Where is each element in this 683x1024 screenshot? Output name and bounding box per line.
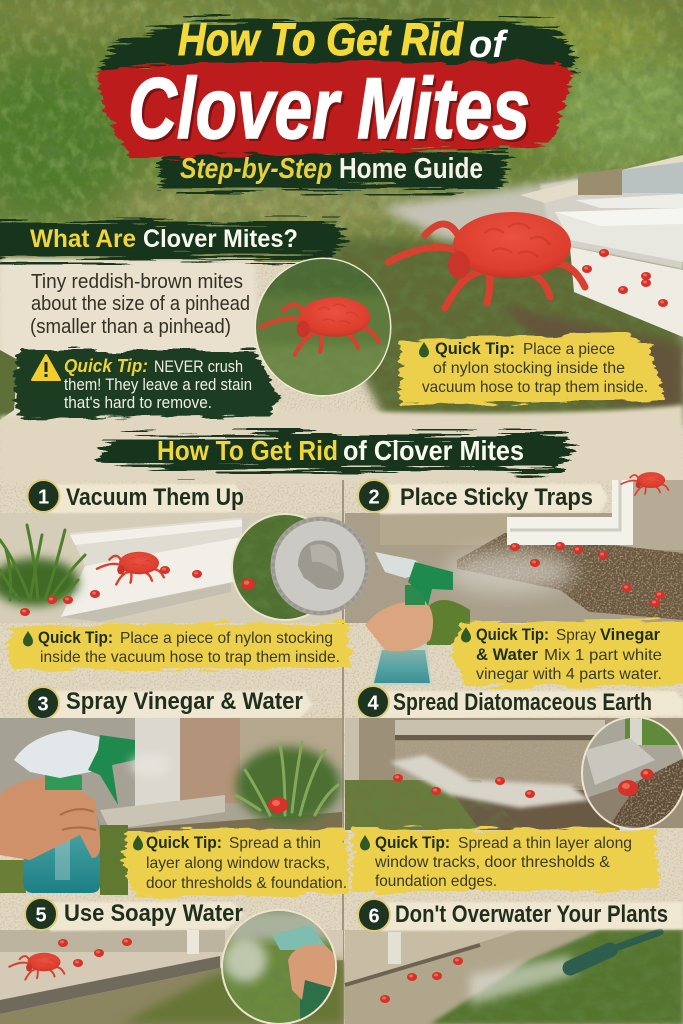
text: description: Tiny reddish-brown mites	[31, 271, 243, 293]
tip panel: nylon stocking: Quick Tip:	[435, 340, 515, 358]
step 1 heading: Vacuum Them Up	[66, 484, 244, 511]
tip panel: step 3: Spread a thin	[229, 835, 321, 852]
photo: step 1 window sill	[0, 513, 343, 623]
title line 1: How To Get Rid	[178, 14, 464, 65]
text: description	[30, 271, 250, 338]
circle photo: step 5 spray	[220, 909, 340, 1024]
step 6 heading: 6	[368, 906, 380, 928]
icon: warning triangle	[32, 355, 60, 380]
photo: step 3 wall and plant	[0, 718, 342, 895]
tip panel: step 3: layer along window tracks,	[146, 855, 330, 872]
photo: large mite on window sill	[300, 155, 683, 425]
tip panel: never crush: them! They leave a red stain	[64, 375, 252, 394]
section heading: what are clover mites: What Are	[30, 225, 136, 253]
tip panel: never crush: that's hard to remove.	[64, 393, 212, 412]
step 4 heading: 4	[367, 692, 379, 714]
tip panel: never crush: Quick Tip:	[64, 355, 148, 376]
step 3 heading: 3	[37, 694, 49, 716]
tip panel: step 4	[352, 828, 660, 892]
tip panel: step 2: Spray	[556, 627, 596, 644]
tip panel: step 4: foundation edges.	[375, 873, 497, 890]
title line 3: Step-by-Step	[180, 153, 332, 185]
tip panel: nylon stocking: vacuum hose to trap them inside.	[422, 379, 648, 396]
tip panel: step 4: window tracks, door thresholds &	[374, 854, 610, 871]
step 5 heading: 5	[35, 904, 47, 926]
tip panel: step 2: vinegar with 4 parts water.	[476, 666, 662, 683]
photo: garden header	[0, 0, 683, 262]
step 5 heading: Use Soapy Water	[64, 900, 243, 927]
step 2 heading: Place Sticky Traps	[400, 484, 593, 511]
icon: small mite on wall	[621, 472, 669, 495]
tip panel: step 2	[450, 620, 683, 686]
circle photo: mite beside quarter	[230, 510, 370, 625]
photo: step 6 hose and lawn	[345, 930, 683, 1024]
tip panel: never crush	[14, 350, 278, 418]
tip panel: nylon stocking: Place a piece	[523, 341, 615, 358]
spray bottle with hand: step 2	[365, 552, 453, 685]
tip panel: nylon stocking	[400, 332, 665, 405]
step 3 heading: Spray Vinegar & Water	[66, 688, 303, 715]
tip panel: step 4: Spread a thin layer along	[458, 835, 632, 852]
tip panel: step 4: Quick Tip:	[375, 834, 450, 852]
spray bottle with hand: step 3	[0, 730, 170, 893]
title line 1: of	[469, 24, 508, 66]
tip panel: step 1: Place a piece of nylon stocking	[120, 630, 333, 647]
tip panel: step 3	[122, 828, 350, 897]
photo: step 2 garden bed	[345, 472, 683, 645]
step 2 heading	[358, 480, 608, 514]
tip panel: step 1: inside the vacuum hose to trap them inside.	[40, 649, 340, 666]
photo: step 5 pavement	[0, 930, 343, 1024]
tip panel: step 3: Quick Tip:	[146, 834, 222, 852]
circle photo: mite on grass	[254, 258, 392, 396]
section heading: how to get rid: How To Get Rid	[157, 435, 338, 466]
step 1 heading: 1	[38, 486, 49, 508]
panel: lower page band	[0, 405, 683, 482]
section heading: how to get rid	[100, 434, 572, 472]
tip panel: never crush: NEVER crush	[154, 357, 243, 376]
section heading: how to get rid: of Clover Mites	[343, 435, 524, 466]
text: description: about the size of a pinhead	[31, 293, 250, 315]
section heading: what are clover mites: Clover Mites?	[143, 225, 298, 253]
tip panel: step 2: & Water	[476, 646, 539, 664]
tip panel: step 2: Mix 1 part white	[544, 647, 662, 664]
step 2 heading: 2	[368, 486, 380, 508]
title line 3: Home Guide	[339, 153, 483, 185]
divider	[342, 480, 344, 1024]
circle photo: step 4 steps with mites	[580, 715, 683, 835]
step 1 heading	[28, 480, 245, 513]
tip panel: step 1: Quick Tip:	[38, 629, 113, 647]
plant	[0, 525, 85, 606]
title line 2: Clover Mites	[131, 64, 533, 160]
section heading: what are clover mites	[0, 222, 345, 260]
tip panel: nylon stocking: of nylon stocking inside the	[433, 360, 625, 377]
title line 2: Clover Mites	[128, 61, 530, 157]
step 5 heading	[25, 898, 244, 931]
title banner	[96, 14, 575, 190]
icon: drop	[419, 342, 429, 358]
text: description: (smaller than a pinhead)	[30, 316, 231, 338]
tip panel: step 2: Quick Tip:	[476, 626, 549, 644]
title line 3	[180, 153, 483, 185]
tip panel: step 2: Vinegar	[600, 626, 661, 644]
icon: quarter coin	[270, 516, 370, 616]
photo: step 4 powder line	[345, 718, 683, 830]
tip panel: step 3: door thresholds & foundation.	[146, 875, 347, 892]
tip panel: step 1	[8, 622, 350, 670]
panel: cream info background	[0, 258, 280, 420]
